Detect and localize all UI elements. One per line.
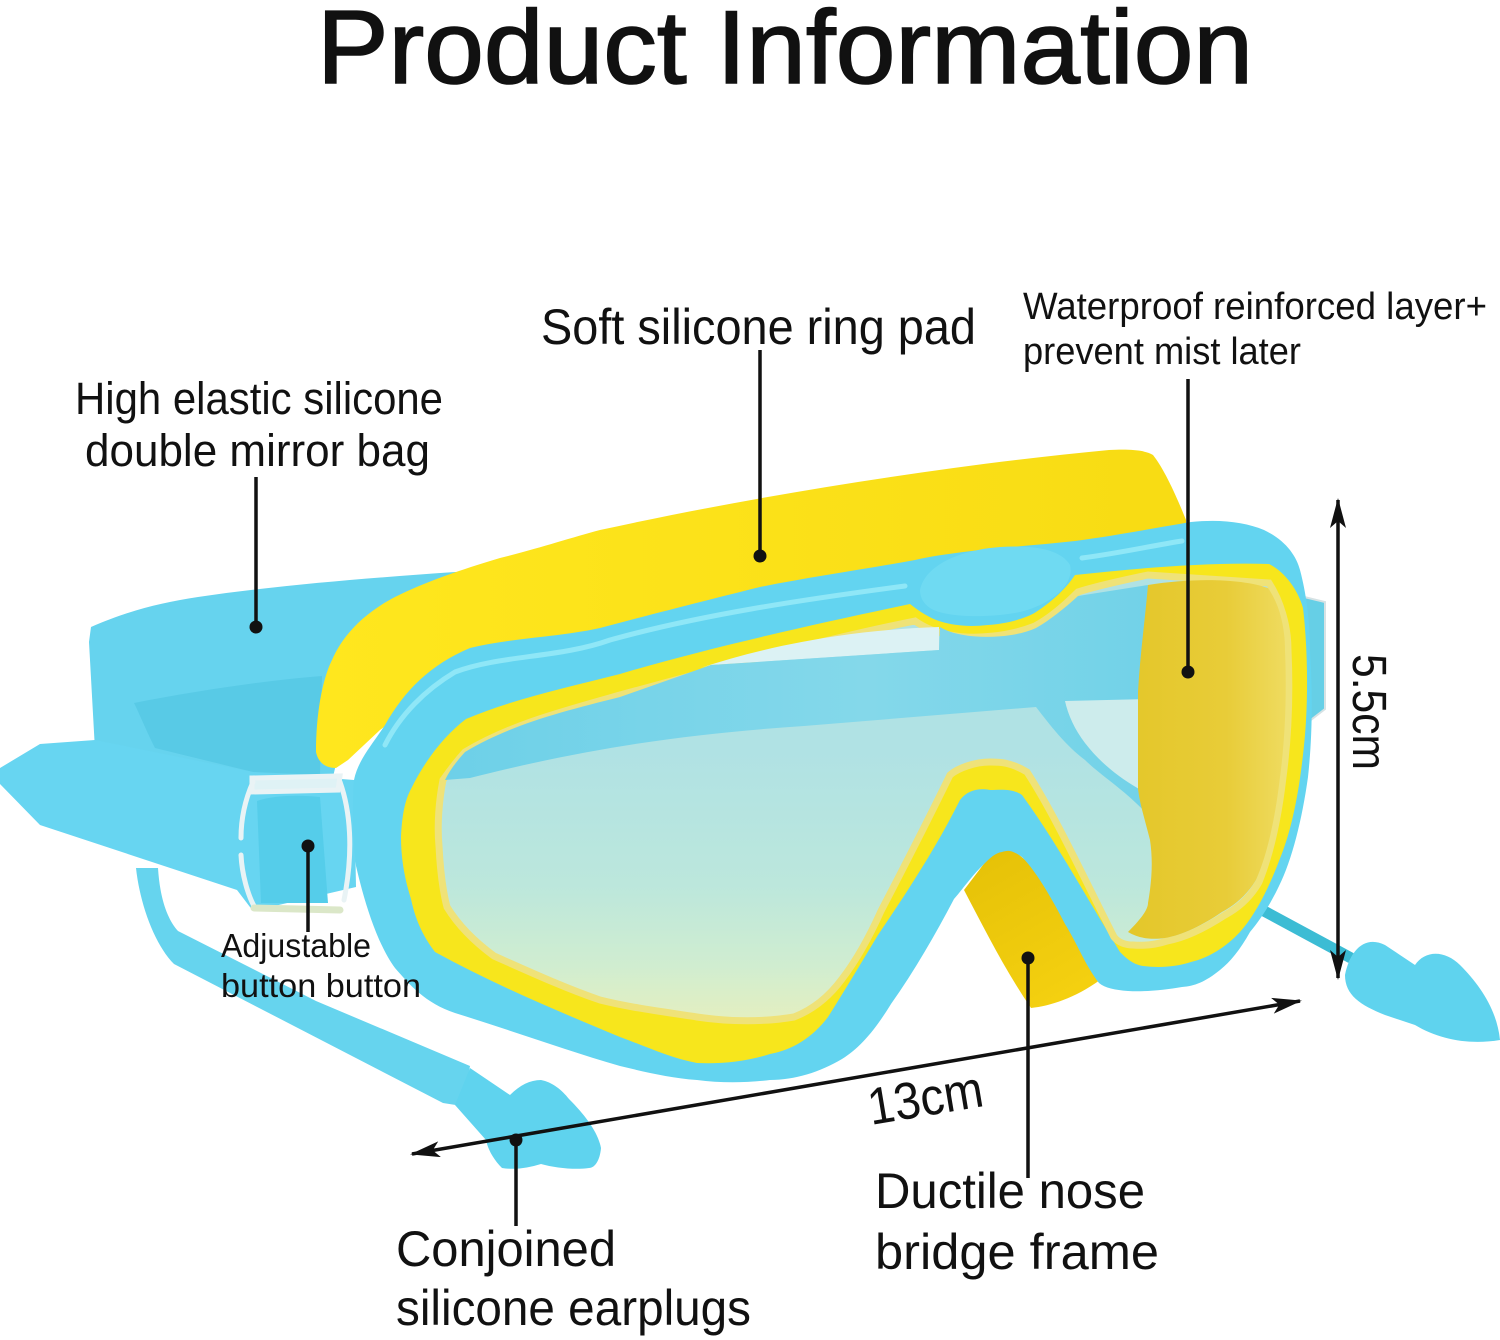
white window above strap	[700, 627, 939, 668]
clear adjustable buckle	[241, 776, 350, 910]
callout: conjoined silicone earplugs: silicone earplugs	[396, 1280, 751, 1336]
callout: ductile nose bridge frame: Ductile nose	[875, 1163, 1145, 1219]
callout: ductile nose bridge frame	[875, 952, 1159, 1280]
callout: waterproof reinforced layer: Waterproof reinforced layer+	[1023, 286, 1487, 328]
callout: high elastic silicone: double mirror bag	[85, 425, 430, 476]
top buckle on frame	[920, 546, 1071, 616]
buckle centre	[257, 796, 328, 903]
side strap	[0, 740, 356, 911]
callout: soft silicone ring pad	[541, 299, 976, 562]
blue strap seen through lens	[445, 585, 1148, 815]
callout: high elastic silicone	[75, 373, 443, 634]
callout: soft silicone ring pad: Soft silicone ring pad	[541, 299, 976, 355]
yellow inner rim	[401, 564, 1307, 1063]
callout: high elastic silicone: High elastic silicone	[75, 373, 443, 424]
callout: ductile nose bridge frame: bridge frame	[875, 1224, 1159, 1280]
goggle frame	[353, 521, 1312, 1082]
right earplug cord	[1264, 911, 1351, 958]
callout: adjustable button: button button	[221, 967, 421, 1004]
lower clear lens with rim strip	[438, 575, 1289, 1021]
callout: conjoined silicone earplugs: Conjoined	[396, 1221, 616, 1277]
callout: adjustable button	[221, 840, 421, 1004]
left earplug cord	[136, 868, 470, 1106]
frame highlights	[385, 541, 1182, 745]
illustration: swimming goggles	[0, 450, 1500, 1169]
dimension arrow: width 13cm: 13cm	[863, 1060, 987, 1137]
right strap stub	[1300, 596, 1325, 726]
yellow lens right	[1128, 580, 1286, 939]
dimension arrow: height 5.5cm: 5.5cm	[1342, 654, 1395, 770]
callout: adjustable button: Adjustable	[221, 927, 371, 964]
nose pad	[964, 840, 1100, 1008]
left earplug	[455, 1068, 601, 1169]
callout: waterproof reinforced layer: prevent mist later	[1023, 331, 1301, 373]
back strap inner face	[134, 676, 322, 775]
right earplug	[1345, 942, 1500, 1042]
clear window through strap	[1065, 699, 1148, 795]
callout: waterproof reinforced layer	[1023, 286, 1487, 678]
yellow silicone ring pad	[316, 450, 1186, 768]
dimension arrow: width 13cm	[412, 1001, 1300, 1154]
callout: conjoined silicone earplugs	[396, 1134, 751, 1336]
back strap	[89, 572, 490, 790]
